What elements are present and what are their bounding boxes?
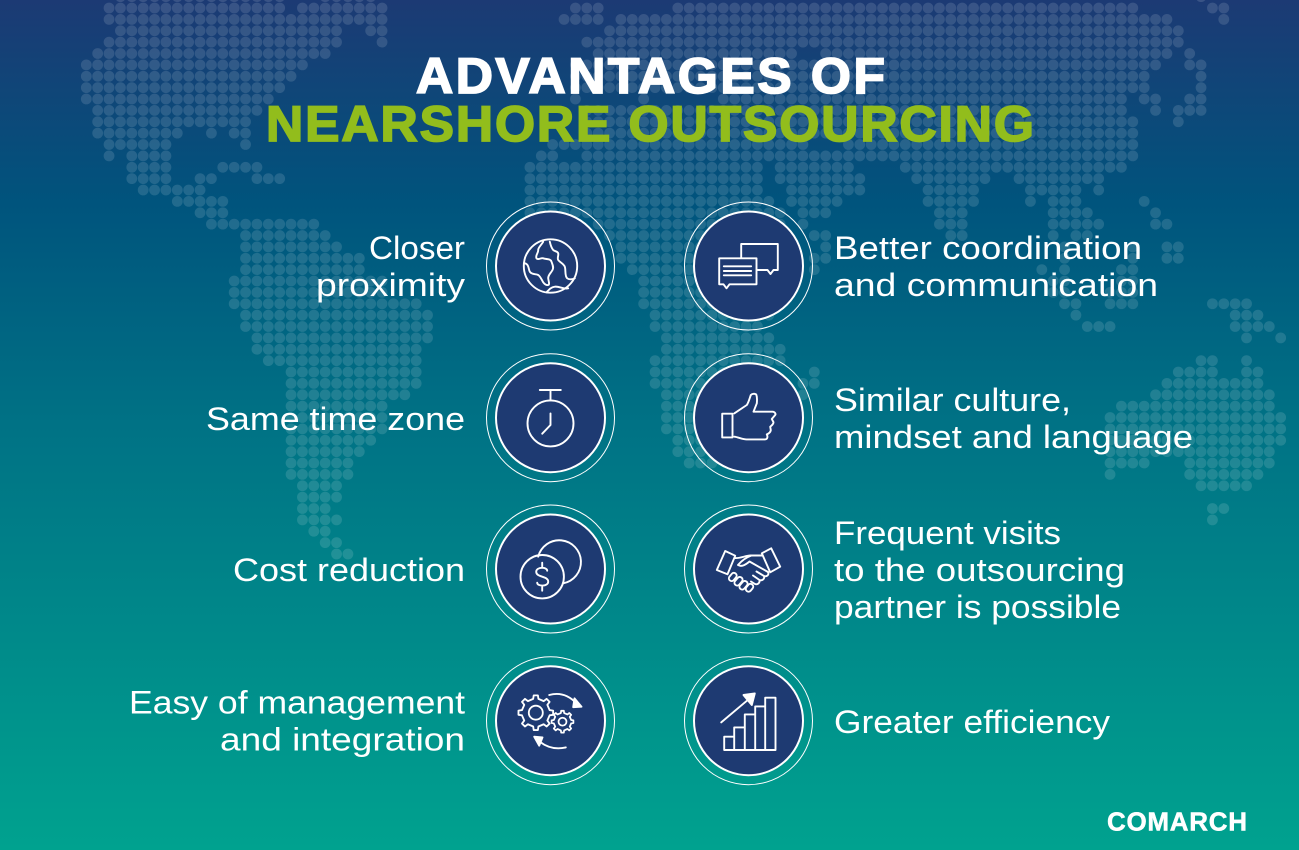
label: same time zone: Same time zone [206, 401, 465, 437]
label: closer proximity [316, 230, 465, 303]
label: frequent visits to the outsourcing partner is possible [834, 515, 1125, 625]
badge: stopwatch icon [486, 354, 614, 482]
item: greater efficiency [684, 657, 1110, 785]
label: cost reduction: Cost reduction [233, 552, 465, 588]
logo: COMARCH: COMARCH [1107, 806, 1247, 836]
label: similar culture, mindset and language: Similar culture, [834, 382, 1071, 418]
label: greater efficiency: Greater efficiency [834, 704, 1110, 740]
dotted world map [86, 0, 1281, 554]
label: better coordination and communication: and communication [834, 267, 1158, 303]
item: similar culture [684, 354, 1193, 482]
label: closer proximity: proximity [316, 267, 465, 303]
badge: gears icon [486, 657, 614, 785]
label: better coordination and communication: Better coordination [834, 230, 1142, 266]
title line 1: ADVANTAGES OF [416, 48, 885, 104]
badge: globe icon [486, 202, 614, 330]
item: frequent visits [684, 505, 1125, 633]
label: closer proximity: Closer [369, 230, 465, 266]
badge: coins icon [486, 505, 614, 633]
item: closer proximity [316, 202, 614, 330]
label: easy of management and integration: and integration [220, 722, 465, 758]
badge: chat bubbles icon [684, 202, 812, 330]
badge: handshake icon [684, 505, 812, 633]
item: management and integration [129, 657, 614, 785]
label: frequent visits to the outsourcing partner is possible: partner is possible [834, 589, 1121, 625]
label: easy of management and integration: Easy of management [129, 684, 465, 720]
label: easy of management and integration [129, 684, 465, 758]
label: similar culture, mindset and language [834, 382, 1193, 455]
badge: bar chart icon [684, 657, 812, 785]
item: better coordination [684, 202, 1158, 330]
title [266, 48, 1034, 152]
label: similar culture, mindset and language: mindset and language [834, 419, 1193, 455]
label: frequent visits to the outsourcing partner is possible: Frequent visits [834, 515, 1061, 551]
label: frequent visits to the outsourcing partner is possible: to the outsourcing [834, 552, 1125, 588]
label: better coordination and communication [834, 230, 1158, 303]
item: same time zone [206, 354, 614, 482]
badge: thumbs up icon [684, 354, 812, 482]
title line 2: NEARSHORE OUTSOURCING [266, 96, 1034, 152]
item: cost reduction [233, 505, 614, 633]
